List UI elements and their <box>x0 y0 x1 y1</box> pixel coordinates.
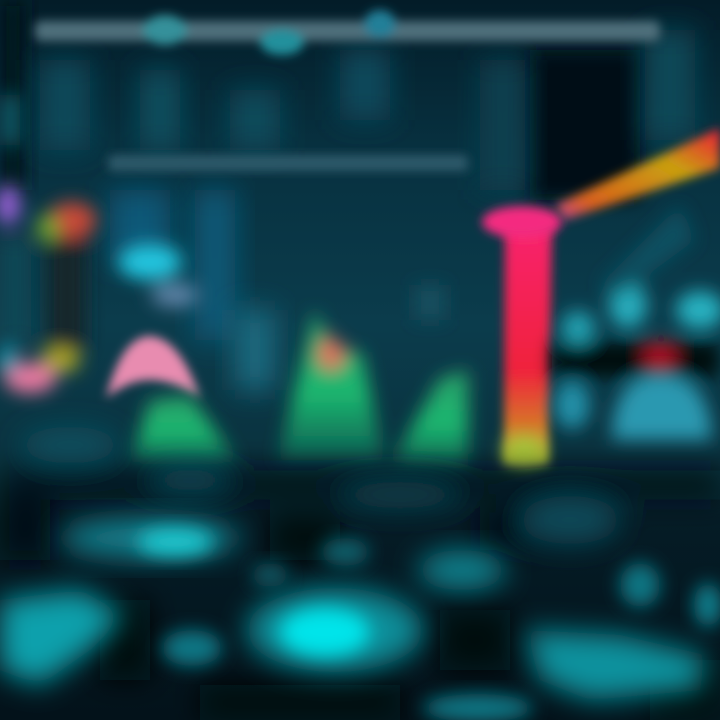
right cluster <box>552 205 720 440</box>
title (illegible, blurred) <box>35 10 660 55</box>
pink mound <box>106 336 200 398</box>
lower cyan glowing blocks <box>0 518 720 720</box>
cyan highlight blobs <box>118 244 199 307</box>
green area chart <box>130 310 468 468</box>
rainbow diagonal band <box>555 128 720 220</box>
subtitle (illegible, blurred) <box>108 155 468 171</box>
lower dark platforms <box>0 427 720 720</box>
red vertical bar <box>482 206 562 467</box>
left ring chart <box>0 185 96 393</box>
